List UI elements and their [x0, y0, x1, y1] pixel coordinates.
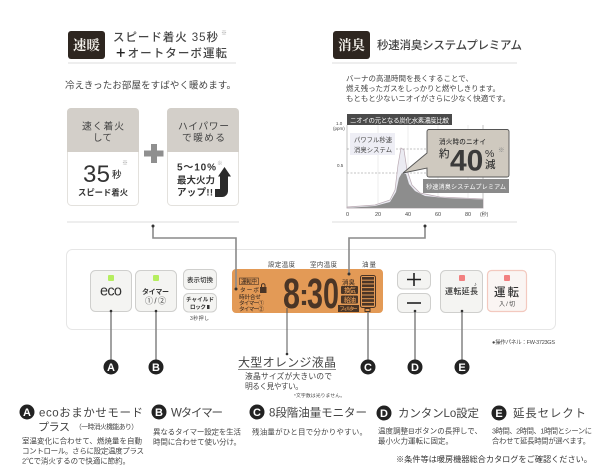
- description text: [346, 73, 510, 103]
- badge: 速暖: 速暖: [73, 37, 100, 53]
- feature A: A: [23, 407, 31, 419]
- marker A: A: [107, 362, 115, 374]
- feature E: [492, 406, 592, 446]
- chart title bar: ニオイの元となる炭化水素濃度比較: [350, 116, 450, 124]
- LCD labels: 油量: [362, 260, 376, 268]
- caption: large orange LCD: *文字数は光りません。: [294, 392, 345, 399]
- feature D: [376, 406, 482, 446]
- marker B: [148, 310, 164, 374]
- badge: 消臭: 消臭: [338, 37, 366, 53]
- axis labels: [333, 121, 489, 218]
- chart title bar: [347, 114, 452, 125]
- button: timer: タイマー: [142, 287, 169, 296]
- callout: 40 percent reduction: 減: [485, 158, 496, 171]
- axis labels: 60: [435, 212, 441, 218]
- icon: up arrow: [215, 167, 231, 197]
- axis labels: 1.0: [336, 121, 343, 126]
- button: child lock: チャイルド: [186, 296, 214, 304]
- card: high power: [167, 108, 239, 206]
- button: eco: [90, 270, 132, 312]
- label: powerful system: パワフル秒速: [354, 135, 393, 144]
- LCD display: タイマー①: [239, 299, 264, 307]
- arrow: rapid heating to LCD: [152, 224, 238, 290]
- button: power: [488, 270, 526, 312]
- label: powerful system: 消臭システム: [354, 145, 392, 154]
- axis labels: (秒): [480, 211, 489, 218]
- LCD display: 消臭: [342, 278, 356, 286]
- feature A: 室温変化に合わせて、燃焼量を自動: [22, 436, 142, 446]
- card: fast ignition: 速く着火: [82, 120, 124, 132]
- dividers: [67, 221, 239, 223]
- callout: 40 percent reduction: 40: [450, 144, 483, 178]
- description text: 燃え残ったガスをしっかりと燃やしきります。: [346, 83, 500, 93]
- callout: 40 percent reduction: 消火時のニオイ: [439, 137, 486, 146]
- LCD display: 換気: [344, 286, 356, 294]
- arrow: deodorizing to LCD: [348, 224, 426, 276]
- card: high power: ※: [217, 160, 223, 167]
- button: minus: [398, 294, 430, 312]
- LCD labels: 設定温度: [268, 260, 296, 268]
- marker E: [454, 310, 470, 374]
- axis labels: 0.5: [337, 163, 344, 168]
- button: power: 運転: [494, 286, 520, 299]
- feature D: 最小火力運転に固定。: [378, 436, 453, 446]
- feature E: E: [495, 408, 503, 420]
- button: timer: ①/②: [145, 296, 166, 306]
- button: timer: [136, 270, 176, 312]
- icon: lock: [260, 284, 266, 293]
- feature A: コントロール。さらに設定温度プラス: [22, 446, 144, 456]
- marker B: B: [152, 362, 160, 374]
- heading: deodorizing: 秒速消臭システムプレミアム: [377, 38, 522, 52]
- model note: ●操作パネル：FW-3723GS: [492, 338, 555, 346]
- card: fast ignition: ※: [122, 160, 128, 167]
- arrow: LCD to caption: [286, 308, 288, 355]
- LCD display: ターボ: [240, 286, 259, 294]
- button: extend: [440, 270, 482, 312]
- chart: odor concentration: [333, 114, 509, 218]
- caption: large orange LCD: [238, 356, 345, 399]
- feature A: ecoおまかせモード: [39, 406, 143, 420]
- feature A: （一時消火機能あり）: [75, 422, 138, 431]
- feature D: カンタンLo設定: [398, 407, 480, 420]
- card: high power: アップ!!: [177, 188, 213, 198]
- heading: rapid heating: [113, 30, 228, 60]
- icon: plus: [144, 144, 164, 163]
- label: premium system: 秒速消臭システムプレミアム: [426, 183, 506, 191]
- feature D: D: [380, 408, 388, 420]
- LCD display: 30: [307, 270, 339, 318]
- feature C: C: [253, 407, 261, 419]
- label: premium system: [423, 179, 509, 193]
- description text: もともと少ないニオイがさらに少なく快適です。: [346, 93, 510, 103]
- card: high power: 最大火力: [177, 174, 215, 186]
- callout: 40 percent reduction: 約: [439, 147, 450, 160]
- caption: large orange LCD: 液晶サイズが大きいので: [245, 371, 332, 381]
- card: fast ignition: スピード着火: [78, 188, 129, 198]
- callout: 40 percent reduction: [403, 130, 509, 178]
- feature C: 残油量がひと目で分かりやすい。: [252, 426, 367, 436]
- heading: rapid heating: ※: [221, 31, 227, 37]
- description text: バーナの高温時間を長くすることで、: [346, 73, 473, 83]
- feature E: 合わせて延長時間が選べます。: [492, 436, 590, 446]
- feature C: [250, 404, 367, 436]
- LCD display: 時計合せ: [239, 293, 261, 301]
- LCD display: 8: [283, 270, 300, 318]
- feature B: Wタイマー: [171, 406, 223, 420]
- marker D: [408, 310, 422, 374]
- LCD display: :: [299, 279, 309, 312]
- subtitle: 冷えきったお部屋をすばやく暖めます。: [65, 80, 236, 92]
- button: extend: 運転延長: [445, 286, 478, 296]
- feature D: 温度調整⊟ボタンの長押しで、: [378, 426, 482, 436]
- button: child lock: [184, 294, 216, 322]
- LCD labels: [268, 260, 376, 268]
- label: powerful system: [350, 133, 395, 155]
- feature C: 8段階油量モニター: [269, 406, 367, 420]
- feature A: プラス: [38, 420, 70, 434]
- button: extend: ♪: [474, 282, 477, 288]
- LCD display: [232, 269, 383, 318]
- marker E: E: [458, 362, 466, 374]
- button: eco: eco: [100, 284, 122, 300]
- panel: rapid heating section: [65, 30, 239, 206]
- LCD labels: 室内温度: [310, 260, 338, 268]
- axis labels: 40: [405, 212, 411, 218]
- LCD display: フィルター: [340, 306, 358, 312]
- button: power: 入/切: [499, 301, 515, 308]
- marker C: C: [364, 362, 372, 374]
- button: child lock: ロック: [190, 303, 206, 311]
- marker A: [104, 310, 118, 374]
- card: fast ignition: 35: [83, 161, 110, 188]
- caption: large orange LCD: 大型オレンジ液晶: [238, 356, 336, 370]
- button: child lock: 3秒押し: [190, 315, 209, 322]
- feature A: 2℃で消火するので快適に節約。: [22, 456, 130, 466]
- marker C: [360, 312, 376, 374]
- axis labels: 20: [375, 212, 381, 218]
- axis labels: 80: [465, 212, 471, 218]
- feature B: [152, 404, 242, 446]
- badge: 速暖: [68, 31, 105, 59]
- feature B: B: [155, 407, 163, 419]
- card: high power: 5～10%: [177, 162, 216, 174]
- feature B: 時間に合わせて使い分け。: [153, 436, 241, 446]
- callout: 40 percent reduction: %: [485, 148, 494, 160]
- heading: rapid heating: ＋オートターボ運転: [115, 47, 228, 60]
- feature B: 異なるタイマー設定を生活: [153, 426, 242, 436]
- card: fast ignition: して: [93, 133, 112, 144]
- card: high power: で暖める: [182, 131, 225, 144]
- axis labels: (ppm): [333, 126, 345, 131]
- button: display switch: [184, 270, 216, 290]
- LCD display: 給油: [344, 295, 356, 304]
- callout: 40 percent reduction: ※: [498, 147, 504, 154]
- heading: rapid heating: スピード着火 35秒: [113, 30, 218, 44]
- card: fast ignition: [67, 108, 139, 206]
- button: plus: [398, 270, 430, 289]
- card: high power: ハイパワー: [178, 120, 229, 132]
- panel: deodorizing section: [332, 31, 522, 218]
- feature E: 延長セレクト: [513, 407, 586, 420]
- oil gauge: [360, 276, 376, 312]
- feature A: [20, 404, 144, 466]
- panel: control panel: [66, 250, 556, 346]
- axis labels: 0: [346, 212, 349, 218]
- caption: large orange LCD: 明るく見やすい。: [245, 382, 303, 391]
- card: fast ignition: 秒: [112, 169, 122, 181]
- LCD display: タイマー②: [239, 305, 264, 313]
- marker D: D: [411, 362, 419, 374]
- feature E: 3時間、2時間、1時間とシーンに: [492, 426, 592, 436]
- LCD display: 運転中: [241, 278, 257, 286]
- footnote: ※条件等は暖房機器総合カタログをご確認ください。: [396, 454, 592, 464]
- badge: 消臭: [333, 31, 370, 59]
- button: display switch: 表示切換: [187, 275, 214, 284]
